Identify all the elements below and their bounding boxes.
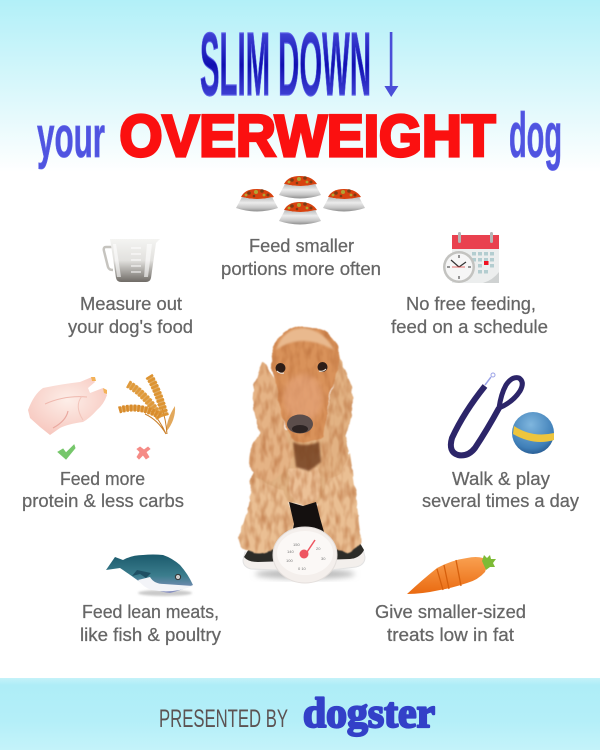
text: measure out: your dog's food: [68, 317, 193, 337]
icon: wheat: [119, 376, 175, 434]
right leg: [316, 453, 361, 553]
icon: food bowls: [236, 176, 365, 224]
text: smaller treats: treats low in fat: [387, 625, 514, 645]
text: measure out: Measure out: [80, 294, 182, 314]
scale dial: 100: [286, 558, 293, 563]
text: no free feeding: feed on a schedule: [391, 317, 548, 337]
text: protein and carbs: Feed more: [60, 469, 145, 489]
text: protein and carbs: protein & less carbs: [22, 491, 184, 511]
icon: cross mark: [137, 447, 150, 459]
dog eyes: [276, 362, 328, 373]
icon: chicken: [28, 377, 107, 435]
icon: down arrow: [384, 32, 398, 97]
right ear: [320, 356, 353, 480]
dog nose: [287, 414, 313, 434]
text: walk and play: Walk & play: [452, 469, 550, 489]
text: no free feeding: No free feeding,: [406, 294, 536, 314]
text: measure out: [68, 294, 193, 337]
top background gradient: [0, 0, 600, 172]
scale dial: 30: [321, 556, 326, 561]
title word: your: your: [37, 105, 105, 170]
left leg: [238, 476, 296, 553]
left ear: [249, 362, 292, 481]
icon: fish: [106, 554, 193, 596]
scale dial: 140: [287, 549, 294, 554]
text: smaller treats: Give smaller-sized: [375, 602, 526, 622]
scale dial: 20: [316, 546, 321, 551]
icon: calendar and clock: [443, 232, 499, 283]
logo: dogster: dogster: [303, 691, 435, 737]
scale dial: 150: [293, 542, 300, 547]
text: smaller treats: [375, 602, 526, 645]
footer band: [0, 678, 600, 750]
text: feed smaller portions: [221, 236, 381, 279]
scale base: [243, 538, 365, 579]
text: no free feeding: [391, 294, 548, 337]
text: lean meats: [80, 602, 221, 645]
footer label: PRESENTED BY: [159, 705, 288, 733]
text: feed smaller portions: Feed smaller: [249, 236, 354, 256]
title: [37, 15, 562, 171]
text: protein and carbs: [22, 469, 184, 511]
icon: measuring cup: [104, 239, 160, 282]
text: lean meats: like fish & poultry: [80, 625, 221, 645]
icon: carrot: [407, 555, 496, 594]
icon: check mark: [58, 445, 75, 459]
dog body: [238, 326, 361, 553]
title word: overweight: OVERWEIGHT: [120, 104, 496, 169]
black gap between legs: [289, 502, 324, 542]
dog on scale: [238, 326, 365, 583]
scale dial: [273, 527, 337, 583]
text: feed smaller portions: portions more often: [221, 259, 381, 279]
icon: ball: [512, 412, 554, 454]
icon: leash: [451, 373, 522, 455]
text: lean meats: Feed lean meats,: [82, 602, 219, 622]
text: walk and play: several times a day: [422, 491, 579, 511]
scale dial: 0 10: [298, 566, 307, 571]
chest: [288, 468, 320, 504]
head: [271, 326, 340, 443]
text: walk and play: [422, 469, 579, 511]
